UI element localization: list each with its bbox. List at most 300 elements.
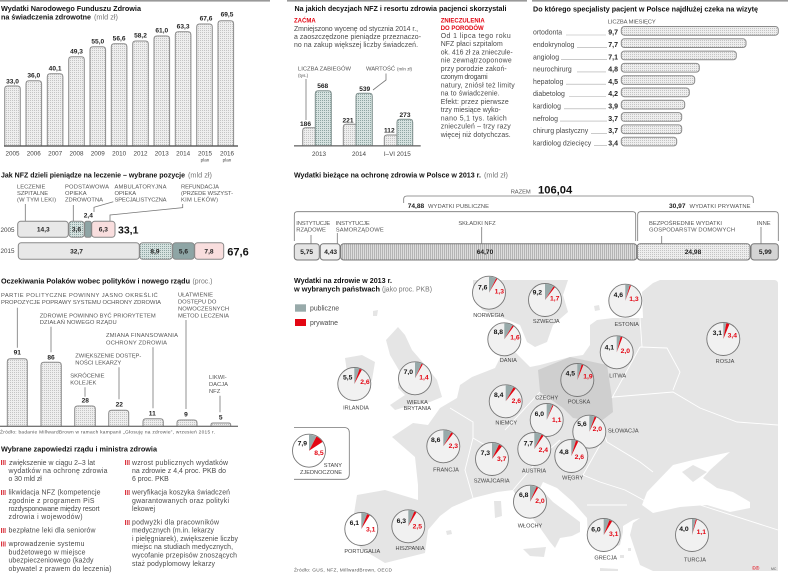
pie: Switzerland	[474, 442, 510, 484]
stacked bar: sources: 64,70	[477, 249, 494, 256]
pie: Ireland: 5,5	[343, 374, 353, 382]
bar chart: yearly spending: plan	[201, 158, 210, 162]
bullet list: right column: weryfikacja koszyka świadczeń	[131, 490, 230, 496]
bar chart: procedures and value: I–VI 2015	[384, 151, 411, 158]
heading: expectations: Oczekiwania Polaków wobec polityków i nowego rządu	[1, 276, 190, 286]
pie: Ireland	[338, 368, 371, 411]
pie: Turkey: TURCJA	[684, 557, 706, 563]
pie: France: 8,6	[431, 437, 441, 444]
text block: childbirth anaesthesia: DO PORODÓW	[441, 24, 484, 32]
bar labels and leaders: DOSTĘPU DO	[178, 300, 217, 306]
callout: United States: STANY	[324, 463, 342, 469]
callout: United States	[292, 428, 349, 479]
pie: Sweden: SZWECJA	[533, 319, 560, 325]
segment labels: SKŁADKI NFZ	[458, 221, 496, 227]
pie: Norway	[472, 276, 506, 319]
horizontal bar chart: months: angiolog	[533, 54, 559, 61]
stacked bar: sources: 24,98	[685, 249, 702, 256]
bar chart: yearly spending: 49,3	[70, 48, 83, 56]
pie: Switzerland: 7,3	[481, 450, 490, 457]
heading: NFZ spending	[1, 4, 142, 22]
source note: Źródło: badanie MillwardBrown w ramach kampanii „Głosuję na zdrowie”, wrzesień 2015 r.	[0, 428, 215, 436]
legend: prywatne	[310, 320, 338, 327]
bar chart: expectations: 22	[116, 402, 123, 409]
text block: childbirth anaesthesia: znieczuleń – trzy razy	[441, 124, 511, 131]
heading: NFZ division: (mld zł)	[188, 172, 212, 180]
category labels: SZPITALNE	[17, 191, 48, 197]
heading: map	[293, 276, 432, 294]
category labels: (W TYM LEKI)	[17, 198, 56, 204]
pie: Lithuania: 4,1	[605, 344, 614, 352]
segment labels: GOSPODARSTW DOMOWYCH	[649, 228, 735, 234]
category labels: SPECJALISTYCZNA	[114, 198, 167, 204]
brackets and subtotals: WYDATKI PRYWATNE	[690, 204, 751, 210]
stacked bar: 2005: 2005	[0, 227, 15, 234]
horizontal bar chart: months: 4,2	[608, 91, 618, 98]
horizontal bar chart: months: 3,7	[608, 128, 618, 135]
total: RAZEM	[511, 190, 531, 196]
text block: childbirth anaesthesia: Efekt: przez pierwsze	[441, 99, 509, 106]
category labels: AMBULATORYJNA	[114, 184, 167, 190]
pie: Austria: 7,7	[524, 440, 533, 448]
text block: childbirth anaesthesia: nie zewnątrzoponowe	[441, 58, 512, 65]
panel: government announcements	[1, 444, 239, 573]
bar labels and leaders: DZIAŁAŃ NOWEGO RZĄDU	[40, 319, 117, 326]
bullet list: left column: budżetowego w miejsce	[8, 550, 86, 556]
pie: Portugal: PORTUGALIA	[344, 549, 381, 555]
bar chart: procedures and value: (tys.)	[298, 73, 309, 78]
pie: Denmark: 8,8	[494, 329, 503, 336]
callout: United States: 8,5	[314, 450, 324, 457]
bullet list: left column: wprowadzenie systemu	[8, 541, 85, 548]
pie: Sweden: 1,7	[550, 296, 560, 302]
pie: Spain	[392, 510, 425, 552]
brackets and subtotals: WYDATKI PUBLICZNE	[428, 204, 489, 210]
pie: France: 2,3	[449, 443, 458, 450]
pie: Spain: 6,3	[397, 518, 406, 525]
panel: Poles' expectations	[0, 276, 238, 436]
map of Europe	[340, 280, 778, 571]
panel: current health expenditure 2013	[294, 170, 778, 260]
category labels: ZDROWOTNA	[65, 198, 103, 204]
horizontal bar chart: months: 3,7	[608, 116, 618, 123]
pie: Lithuania: LITWA	[609, 373, 626, 379]
brackets and subtotals	[294, 196, 778, 241]
bar chart: expectations	[0, 349, 238, 427]
text block: childbirth anaesthesia: Od 1 lipca tego roku	[441, 33, 511, 40]
bar labels and leaders: NOŚCI LEKARZY	[75, 358, 121, 366]
stacked bar: 2005: 14,3	[37, 226, 50, 234]
stacked bar: 2015: 5,6	[179, 248, 188, 256]
text block: childbirth anaesthesia	[440, 18, 515, 139]
bar chart: yearly spending: 56,6	[113, 36, 126, 42]
horizontal bar chart: months: 9,7	[608, 30, 618, 37]
segment labels: SAMORZĄDOWE	[336, 228, 384, 234]
pie: Greece: GRECJA	[594, 556, 617, 562]
pie: France	[427, 430, 460, 473]
pie: Lithuania: 2,0	[621, 348, 630, 355]
bullet list: right column	[125, 460, 239, 568]
brackets and subtotals: 30,97	[669, 203, 686, 210]
bullet list: left column: bezpłatne leki dla seniorów	[8, 528, 96, 534]
pie: Germany: 2,6	[512, 398, 521, 405]
horizontal bar chart: months: ortodonta	[533, 30, 562, 37]
horizontal bar chart: months: hepatolog	[533, 79, 563, 86]
pie: Hungary: 4,8	[559, 449, 569, 456]
pie: Denmark: 1,6	[510, 334, 520, 342]
text block: cataract: ZAĆMA	[294, 16, 316, 24]
stacked bar: 2015: 2015	[0, 248, 15, 255]
category labels	[17, 184, 233, 221]
bar labels and leaders: UŁATWIENIE	[178, 293, 213, 299]
bar chart: procedures and value: 568	[317, 83, 329, 90]
heading: map: Wydatki na zdrowie w 2013 r.	[294, 276, 392, 285]
pie: Russia: ROSJA	[716, 359, 735, 365]
horizontal bar chart: months: nefrolog	[533, 116, 558, 123]
stacked bar: 2005: 6,3	[99, 226, 108, 234]
axis caption: LICZBA MIESIĘCY	[608, 20, 656, 26]
horizontal bar chart: months: neurochirurg	[533, 67, 572, 74]
pie: Hungary: 2,6	[575, 454, 584, 461]
horizontal bar chart: months: 3,4	[608, 140, 618, 147]
pie: Ireland: 2,6	[360, 379, 370, 386]
pie: Ireland: IRLANDIA	[343, 405, 369, 411]
bar chart: yearly spending: 40,1	[49, 66, 62, 72]
horizontal bar chart: months: 3,9	[608, 104, 618, 110]
bullet list: left column: zgodnie z programem PiS	[8, 498, 95, 505]
horizontal bar chart: months: 4,8	[608, 67, 618, 74]
bar labels and leaders: NOWOCZESNYCH	[178, 306, 229, 312]
text block: childbirth anaesthesia: NFZ płaci szpitalom	[441, 41, 503, 48]
bar chart: yearly spending: 2016	[220, 150, 234, 158]
pie: Poland	[561, 364, 594, 405]
segment labels	[296, 219, 771, 244]
text block: childbirth anaesthesia: ZNIECZULENIA	[441, 18, 485, 24]
text block: cataract: no na zakup większej liczby świadczeń.	[294, 42, 418, 49]
bullet list: right column: i pielęgniarek), zwiększenie liczby	[132, 536, 239, 543]
total: 106,04	[538, 184, 573, 196]
pie: Spain: HISZPANIA	[395, 546, 425, 552]
bullet list: left column: obywatel z prawem do leczenia)	[8, 566, 112, 573]
bar chart: yearly spending: 67,6	[200, 16, 213, 22]
text block: childbirth anaesthesia: czonym drogami	[441, 74, 488, 81]
heading: map: w wybranych państwach	[293, 284, 380, 294]
bar labels and leaders: PARTIE POLITYCZNE POWINNY JASNO OKREŚLIĆ	[1, 291, 158, 299]
bar chart: yearly spending: 33,0	[6, 78, 19, 86]
bullet list: left column: ubezpieczeniowego (każdy	[8, 558, 94, 564]
panel: how NFZ divides money	[0, 170, 249, 259]
pie: Spain: 2,5	[413, 524, 422, 530]
stacked bar: 2015: 32,7	[70, 248, 83, 256]
pie: Slovakia	[573, 415, 639, 448]
category labels: OPIEKA	[65, 191, 87, 197]
category labels: REFUNDACJA	[181, 184, 219, 190]
bar chart: procedures and value: 539	[359, 86, 371, 93]
pie: United Kingdom: 7,0	[404, 369, 413, 376]
bullet list: left column: zdrowia i wojewodów)	[8, 514, 82, 521]
pie: Germany: NIEMCY	[495, 420, 517, 426]
stacked bar: 2015: 7,8	[204, 248, 214, 256]
panel: specialist waiting times	[533, 4, 778, 147]
bar labels and leaders: LIKWI-	[209, 375, 227, 381]
pie: Czechia: CZECHY	[535, 396, 558, 402]
stacked bar: 2005: 2,4	[84, 213, 93, 220]
pie: Austria	[518, 432, 551, 475]
panel: health spending in selected countries map	[292, 276, 778, 574]
bar chart: expectations: 28	[82, 397, 89, 404]
bullet list: right column: miejsc na studiach medycznych,	[132, 544, 233, 551]
pie: Greece: 6,0	[591, 526, 601, 534]
segment labels: BEZPOŚREDNIE WYDATKI	[649, 219, 722, 227]
bullet list: right column: wzrost publicznych wydatków	[131, 460, 228, 467]
text block: childbirth anaesthesia: więcej niż dotychczas.	[440, 132, 511, 139]
total	[511, 184, 573, 196]
pie: Italy	[514, 485, 546, 530]
pie: Greece	[587, 518, 620, 562]
heading: expenditure: Wydatki bieżące na ochronę zdrowia w Polsce w 2013 r.	[294, 170, 481, 180]
bar chart: expectations: 9	[184, 412, 188, 419]
callout: United States: 7,9	[298, 440, 307, 448]
pie: Czechia: 6,0	[535, 411, 544, 418]
bar chart: procedures and value: 112	[384, 128, 395, 134]
pie: United Kingdom: WIELKA	[407, 400, 428, 406]
pie: Sweden	[528, 284, 562, 325]
text block: childbirth anaesthesia: nano 5,1 tys. takich	[441, 116, 507, 122]
bar chart: procedures and value: 2013	[312, 151, 326, 158]
bullet list: left column: likwidacja NFZ (kompetencje	[8, 490, 101, 496]
category labels: (PRZEDE WSZYST-	[181, 191, 233, 197]
pie: Russia: 3,1	[713, 330, 722, 337]
bar chart: yearly spending: 2013	[155, 150, 169, 158]
pie: Norway: 1,3	[495, 288, 504, 296]
pie: Germany: 8,4	[494, 392, 504, 399]
panel: NFZ decisions patients benefited from	[294, 4, 515, 158]
pie: Poland: POLSKA	[568, 399, 590, 405]
category labels: KIM LEKÓW)	[181, 197, 218, 204]
pie: Norway: 7,6	[478, 284, 488, 292]
credit marks: ©®	[752, 565, 760, 572]
stacked bar: sources: 5,75	[300, 249, 313, 256]
heading: NFZ spending: Wydatki Narodowego Funduszu Zdrowia	[1, 4, 142, 13]
pie: United Kingdom: BRYTANIA	[404, 406, 431, 412]
pie: Czechia: 1,1	[552, 417, 562, 424]
pie: Switzerland: 3,7	[497, 456, 507, 463]
bullet list: left column: zwiększenie w ciągu 2–3 lat	[9, 460, 95, 467]
pie: Poland: 1,9	[583, 374, 593, 380]
bullet list: right column: na zdrowie z 4,4 proc. PKB do	[132, 468, 226, 475]
pie: Czechia	[530, 396, 563, 436]
pie: Turkey: 1,1	[697, 529, 706, 536]
bar chart: procedures and value: 2014	[352, 151, 366, 158]
heading: NFZ division: Jak NFZ dzieli pieniądze na leczenie – wybrane pozycje	[1, 170, 185, 180]
bar labels and leaders: PROPOZYCJE POPRAWY SYSTEMU OCHRONY ZDROWIA	[1, 300, 161, 306]
pie: Turkey	[676, 518, 708, 563]
text block: childbirth anaesthesia: trzy miesiące wyko-	[441, 107, 501, 114]
category labels: LECZENIE	[17, 184, 45, 190]
bar chart: yearly spending: plan	[223, 158, 232, 162]
pie: Lithuania	[600, 336, 633, 379]
pie: Russia	[707, 322, 740, 365]
stacked bar: sources: 4,43	[324, 249, 337, 256]
bar labels and leaders: OCHRONY ZDROWIA	[106, 340, 167, 346]
bar chart: yearly spending: 2005	[5, 150, 20, 158]
panel: NFZ spending bar chart	[1, 4, 238, 162]
pie: Portugal: 6,1	[350, 520, 359, 527]
bullet list: right column: staż podyplomowy lekarzy	[132, 561, 216, 568]
credit marks: MC	[771, 567, 777, 571]
text block: childbirth anaesthesia: ok. 416 zł za znieczule-	[441, 50, 513, 56]
bullet list: right column: wycofanie przepisów znoszących	[131, 552, 237, 560]
pie: France: FRANCJA	[433, 467, 459, 473]
text block: childbirth anaesthesia: na to świadczenie.	[441, 91, 500, 98]
pie: United Kingdom: 1,4	[419, 374, 429, 382]
bar chart: yearly spending: 2009	[91, 150, 105, 158]
pie: Portugal	[344, 512, 381, 555]
text block: cataract: Zmniejszono wycenę od stycznia 2014 r.,	[294, 26, 418, 33]
stacked bar: 2015: 67,6	[227, 246, 249, 258]
pie: Germany	[489, 385, 522, 426]
heading: decisions: Na jakich decyzjach NFZ i resortu zdrowia pacjenci skorzystali	[294, 4, 506, 13]
bar chart: yearly spending: 2007	[48, 150, 63, 158]
pie: Italy: WŁOCHY	[518, 524, 543, 530]
bullet list: left column: o 30 mld zł	[8, 476, 42, 483]
bar chart: expectations: 5	[219, 415, 223, 422]
bar chart: yearly spending: 63,3	[177, 24, 190, 30]
callout: United States: ZJEDNOCZONE	[300, 470, 342, 476]
bar chart: yearly spending: 69,5	[221, 12, 234, 18]
bar chart: procedures and value: WARTOŚĆ	[366, 64, 395, 72]
stacked bar: 2005	[0, 213, 139, 237]
horizontal bar chart: months: diabetolog	[533, 91, 565, 98]
pie: Greece: 3,1	[609, 531, 619, 538]
brackets and subtotals: 74,88	[408, 203, 425, 210]
pie: Slovakia: 5,6	[577, 421, 587, 428]
bar chart: expectations: 86	[47, 354, 55, 361]
horizontal bar chart: months: endokrynolog	[533, 42, 575, 49]
bar labels and leaders	[1, 291, 229, 412]
bullet list: right column: podwyżki dla pracowników	[132, 520, 219, 526]
segment labels: RZĄDOWE	[296, 228, 326, 234]
bar chart: yearly spending: 2012	[133, 150, 148, 158]
bar chart: yearly spending	[4, 12, 238, 162]
segment labels: INNE	[757, 221, 771, 227]
bullet list: left column: wydatków na ochronę zdrowia	[8, 468, 108, 475]
bar chart: procedures and value: 186	[300, 121, 311, 128]
category labels: PODSTAWOWA	[65, 184, 109, 190]
heading: waiting times: Do którego specjalisty pacjent w Polsce najdłużej czeka na wizytę	[533, 4, 758, 14]
pie: Estonia	[609, 284, 642, 328]
bar chart: procedures and value: LICZBA ZABIEGÓW	[298, 66, 352, 72]
stacked bar: 2005: 33,1	[118, 224, 139, 236]
bar chart: procedures and value: 273	[399, 112, 411, 119]
pie: Estonia: ESTONIA	[614, 322, 639, 328]
text block: childbirth anaesthesia: natury, zniósł też limity	[441, 82, 515, 90]
bullet list: left column	[1, 460, 112, 573]
bar chart: yearly spending: 61,0	[155, 28, 169, 34]
pie: Austria: 2,4	[539, 447, 548, 454]
pie: Norway: NORWEGIA	[473, 313, 504, 319]
pie: United Kingdom	[398, 362, 432, 412]
horizontal bar chart: months: kardiolog dziecięcy	[533, 140, 592, 147]
text block: childbirth anaesthesia: przy porodzie zakoń-	[441, 66, 507, 73]
bar chart: procedures and value: 221	[342, 117, 354, 124]
bar labels and leaders: ZDROWIE POWINNO BYĆ PRIORYTETEM	[40, 312, 156, 319]
category labels: OPIEKA	[114, 191, 136, 197]
horizontal bar chart: months: 7,7	[608, 42, 618, 49]
horizontal bar chart: months: chirurg plastyczny	[533, 128, 589, 135]
pie: Turkey: 4,0	[679, 526, 689, 533]
pie: Switzerland: SZWAJCARIA	[474, 478, 510, 484]
stacked bar: sources: 5,99	[759, 249, 772, 256]
segment labels: INSTYTUCJE	[336, 221, 370, 227]
bar labels and leaders: DACJA	[209, 382, 228, 388]
pie: Denmark	[488, 323, 521, 364]
pie: Estonia: 1,3	[629, 296, 639, 303]
heading: map: (jako proc. PKB)	[382, 286, 432, 294]
bar chart: procedures and value: (mln zł)	[397, 66, 413, 72]
stacked bar: 2005: 3,6	[72, 226, 81, 234]
heading: expectations: (proc.)	[192, 278, 212, 286]
pie: Hungary: WĘGRY	[562, 476, 583, 482]
pie: Hungary	[555, 440, 588, 482]
pie: Slovakia: SŁOWACJA	[608, 429, 639, 435]
heading: NFZ spending: (mld zł)	[94, 14, 118, 22]
text block: cataract: a zaoszczędzone pieniądze przeznaczo-	[294, 34, 421, 41]
bullet list: right column: 6 proc. PKB	[132, 476, 169, 483]
horizontal bar chart: months: 7,1	[608, 54, 618, 61]
bar chart: yearly spending: 58,2	[134, 32, 147, 40]
legend: publiczne	[310, 306, 339, 312]
pie: Slovakia: 2,0	[593, 426, 602, 433]
credit marks	[752, 565, 777, 572]
bullet list: right column: medycznych (m.in. lekarzy	[132, 528, 215, 534]
pie: Denmark: DANIA	[500, 358, 517, 364]
pie: Sweden: 9,2	[533, 290, 542, 296]
bar labels and leaders: METOD LECZENIA	[178, 313, 229, 319]
bullet list: left column: rozdysponowane między resort	[8, 506, 100, 513]
horizontal bar chart: months: kardiolog	[533, 104, 561, 110]
pie: Estonia: 4,6	[614, 292, 623, 299]
horizontal bar chart: months	[533, 26, 778, 147]
pie: Russia: 3,4	[728, 332, 737, 340]
legend	[295, 304, 339, 327]
pie: Poland: 4,5	[566, 370, 575, 378]
stacked bar: 2015	[0, 243, 249, 259]
bar chart: yearly spending: 2014	[176, 150, 191, 158]
bar chart: yearly spending: 2010	[112, 150, 127, 158]
bar chart: yearly spending: 55,0	[91, 38, 105, 46]
bar chart: yearly spending: 36,0	[27, 72, 41, 80]
bar chart: expectations: 91	[14, 349, 21, 356]
pie: Portugal: 3,1	[366, 526, 376, 534]
pie: Austria: AUSTRIA	[522, 469, 546, 475]
stacked bar: 2015: 8,9	[150, 248, 160, 256]
bar labels and leaders: KOLEJEK	[70, 381, 97, 387]
bar chart: yearly spending: 2015	[198, 150, 212, 158]
bullet list: right column: lekowej	[132, 506, 155, 513]
bar labels and leaders: ZWIĘKSZENIE DOSTĘP-	[75, 353, 141, 359]
heading: NFZ spending: na świadczenia zdrowotne	[1, 12, 91, 22]
horizontal bar chart: months: 4,5	[608, 79, 618, 86]
heading: expenditure: (mld zł)	[484, 172, 508, 180]
bar labels and leaders: NFZ	[209, 389, 221, 395]
text block: cataract	[294, 16, 421, 49]
bar labels and leaders: SKRÓCENIE	[70, 372, 105, 379]
bar chart: procedures and value	[294, 64, 421, 158]
source note: Źródło: GUS, NFZ, MillwardBrown, OECD	[294, 566, 393, 574]
bar chart: yearly spending: 2008	[69, 150, 84, 158]
heading: announcements: Wybrane zapowiedzi rządu i ministra zdrowia	[1, 444, 158, 454]
